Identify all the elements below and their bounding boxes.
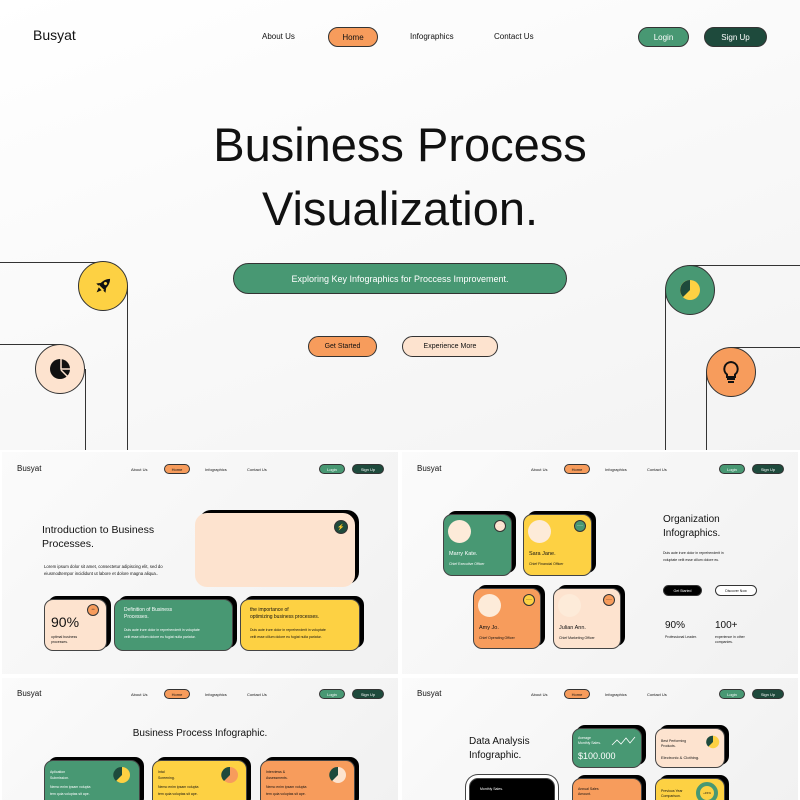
data cards: Amount. (578, 792, 591, 796)
nav links: Sign Up (721, 32, 750, 42)
heading (663, 514, 720, 539)
step cards (44, 757, 359, 800)
person cards: Chief Executive Officer (449, 562, 485, 566)
step cards: tem quia voluptas sit ape. (266, 792, 306, 796)
buttons: Discover Now (725, 588, 747, 592)
data cards: +15% (703, 791, 711, 795)
step cards: Aplication (50, 770, 65, 774)
panel: data analysis: Infographics (605, 692, 627, 697)
step cards: Interviews & (266, 770, 285, 774)
panel: process infographic: Busyat (17, 689, 41, 698)
buttons (308, 336, 498, 357)
data cards: Annual Sales (578, 787, 599, 791)
panel: introduction: About Us (131, 467, 147, 472)
stat card (44, 599, 107, 651)
panel: process infographic: Sign Up (361, 692, 375, 696)
step cards: Screening. (158, 776, 175, 780)
nav links: About Us (262, 32, 295, 41)
hero card: ⚡ (337, 524, 345, 530)
person cards: ··· (526, 597, 532, 603)
panel: data analysis: Home (572, 692, 582, 696)
stat card: − (91, 607, 95, 613)
nav links (262, 27, 767, 47)
person cards: Chief Financial Officer (529, 562, 563, 566)
stats: 90% (665, 620, 685, 631)
importance card: Duis aute irure dolor in reprehenderit in voluptate (250, 628, 326, 632)
heading: Data Analysis (469, 736, 530, 747)
person cards: ··· (577, 523, 583, 529)
data cards: Products. (661, 744, 676, 748)
heading: Organization (663, 514, 720, 525)
panel: introduction: Busyat (17, 464, 41, 473)
title: Visualization. (262, 182, 538, 235)
stats (665, 620, 745, 644)
step cards: Nemo enim ipsam volupta (158, 785, 198, 789)
stat card: 90% (51, 614, 79, 630)
data cards: Monthly Sales. (578, 741, 601, 745)
importance card: optimizing business processes. (250, 614, 319, 620)
body text: eiusmodtempor incididunt ut labore et dolore magna aliqua.. (44, 571, 158, 576)
step cards: Nemo enim ipsam volupta (266, 785, 306, 789)
panel: process infographic: Infographics (205, 692, 227, 697)
step cards: tem quia voluptas sit ape. (50, 792, 90, 796)
data cards: $100.000 (578, 751, 616, 761)
importance card: velit esse cillum dolore eu fugiat nulla pariatur. (250, 635, 322, 639)
subtitle pill (233, 263, 567, 294)
heading: Business Process Infographic. (133, 728, 267, 739)
step cards: Submission. (50, 776, 69, 780)
definition card: Duis aute irure dolor in reprehenderit in voluptate (124, 628, 200, 632)
panel: organization: Sign Up (761, 466, 775, 472)
panel: process infographic: About Us (131, 692, 147, 697)
stats: companies. (715, 640, 733, 644)
definition card (114, 599, 233, 651)
person cards: Amy Jo. (479, 625, 499, 631)
body text (44, 564, 163, 576)
data cards: Previous Year (661, 789, 683, 793)
nav links: Home (342, 32, 364, 42)
step cards: Nemo enim ipsam volupta (50, 785, 90, 789)
panel: organization (402, 452, 798, 674)
buttons: Experience More (424, 343, 476, 350)
nav links: Infographics (410, 32, 454, 41)
panel: process infographic: Login (327, 692, 337, 696)
panel: introduction: Login (327, 466, 337, 472)
panel: organization: Busyat (417, 464, 441, 473)
data cards: Comparison. (661, 794, 681, 798)
heading: Infographic. (469, 750, 521, 761)
icon: pie chart (35, 344, 85, 394)
nav links: Contact Us (494, 32, 534, 41)
importance card (240, 599, 360, 651)
panel: process infographic: Contact Us (247, 692, 267, 697)
definition card: velit esse cillum dolore eu fugiat nulla pariatur. (124, 635, 196, 639)
body text: Lorem ipsum dolor sit amet, consectetur adipiscing elit, sed do (44, 564, 163, 569)
stat card: optimal business (51, 635, 77, 639)
panel: organization: Contact Us (647, 467, 667, 472)
heading: Infographics. (663, 528, 720, 539)
step cards: tem quia voluptas sit ape. (158, 792, 198, 796)
panel: organization: Home (572, 466, 582, 472)
heading (469, 736, 530, 761)
person cards (443, 511, 625, 649)
panel: data analysis: Login (727, 692, 737, 696)
panel: organization: Infographics (605, 467, 627, 472)
data cards: Electronic & Clothing. (661, 755, 699, 760)
panel: data analysis: Contact Us (647, 692, 667, 697)
buttons (663, 585, 757, 596)
definition card: Definition of Business (124, 607, 172, 613)
panel: process infographic (2, 678, 398, 800)
buttons: Get Started (674, 588, 691, 592)
data cards: Average (578, 736, 591, 740)
person cards: Chief Marketing Officer (559, 636, 595, 640)
person cards: Sara Jane. (529, 551, 556, 557)
heading: Processes. (42, 538, 94, 550)
data cards: Best Performing (661, 739, 686, 743)
panel: hero (0, 0, 800, 450)
panel: introduction (2, 452, 398, 674)
icon: rocket (78, 261, 128, 311)
step cards: Intal (158, 770, 165, 774)
panel: introduction: Contact Us (247, 467, 267, 472)
person cards: Chief Operating Officer (479, 636, 515, 640)
panel: data analysis: About Us (531, 692, 547, 697)
panel: data analysis: Sign Up (761, 692, 775, 696)
heading (42, 524, 154, 550)
title: Business Process (213, 118, 587, 171)
panel: organization: About Us (531, 467, 547, 472)
person cards: Marry Kate. (449, 551, 477, 557)
person cards: ··· (606, 597, 612, 603)
stats: 100+ (715, 620, 738, 631)
step cards: Assessments. (266, 776, 288, 780)
data cards: Monthly Sales. (480, 787, 503, 791)
stats: experience in other (715, 635, 745, 639)
heading: Introduction to Business (42, 524, 154, 536)
logo: Busyat (33, 27, 76, 43)
nav links: Login (654, 32, 673, 42)
stats: Professional Leader. (665, 635, 697, 639)
panel: data analysis: Busyat (417, 689, 441, 698)
importance card: the importance of (250, 607, 289, 613)
title (213, 118, 587, 235)
person cards: Julian Ann. (559, 625, 586, 631)
subtitle pill: Exploring Key Infographics for Proccess Improvement. (291, 274, 509, 284)
panel: process infographic: Home (172, 692, 182, 696)
panel: introduction: Infographics (205, 467, 227, 472)
panel: introduction: Sign Up (361, 466, 375, 472)
panel: organization: Login (727, 466, 737, 472)
stat card: processes. (51, 640, 68, 644)
icon: green pie (665, 265, 715, 315)
data cards (465, 725, 729, 800)
buttons: Get Started (325, 343, 360, 350)
hero card (195, 513, 355, 587)
panel: introduction: Home (172, 466, 182, 472)
panel: organization: voluptate velit esse cillum dolore eu. (663, 558, 719, 562)
panel: data analysis (402, 678, 798, 800)
panel: organization: Duis aute irure dolor in reprehenderit in (663, 551, 724, 555)
icon: lightbulb (706, 347, 756, 397)
definition card: Processes. (124, 614, 149, 620)
person cards: ··· (497, 523, 503, 529)
